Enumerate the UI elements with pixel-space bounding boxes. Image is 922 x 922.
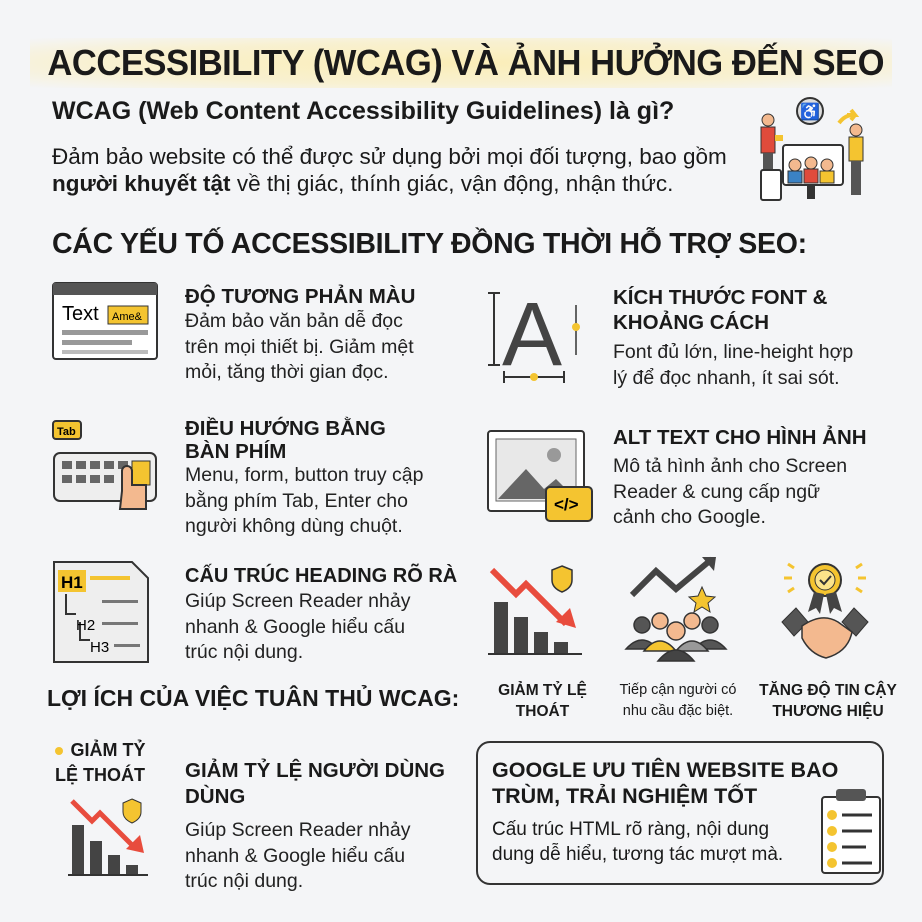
benefit: bounce [55,740,445,892]
text: font size: KHOẢNG CÁCH [613,311,769,334]
icon: heading document: H1 [61,573,83,592]
icon: letter A [488,285,580,385]
text: heading: CẤU TRÚC HEADING RÕ RÀ [185,565,457,587]
callout text: dung dễ hiểu, tương tác mượt mà. [492,844,783,865]
label: reach: nhu cầu đặc biệt. [623,703,733,719]
text: keyboard: Menu, form, button truy cập [185,464,423,486]
text: contrast: trên mọi thiết bị. Giảm mệt [185,336,414,358]
icon: heading document: H3 [90,639,109,656]
text: font size: KÍCH THƯỚC FONT & [613,286,827,309]
label: bounce [498,680,587,720]
text: keyboard: BÀN PHÍM [185,440,286,463]
icon: people growth [624,556,728,662]
icon: keyboard: Tab [57,426,76,438]
text: bounce benefit: nhanh & Google hiểu cấu [185,844,405,866]
text: font size: lý để đọc nhanh, ít sai sót. [613,366,840,388]
icon: image code: </> [554,495,579,514]
callout text [492,819,783,865]
intro heading: WCAG (Web Content Accessibility Guidelines) là gì? [52,97,674,125]
text: keyboard [185,416,423,537]
bullet label [55,740,146,785]
title: ACCESSIBILITY (WCAG) VÀ ẢNH HƯỞNG ĐẾN SEO [47,42,884,83]
icon: contrast window: Ame& [112,311,143,323]
text: heading: nhanh & Google hiểu cấu [185,616,405,638]
bullet label: LỆ THOÁT [55,765,145,785]
icon: trust handshake [781,562,869,659]
icon: contrast window: Text [62,303,99,325]
icon: letter A: A [502,285,562,385]
text: alt text: ALT TEXT CHO HÌNH ẢNH [613,426,867,449]
icon: bounce chart small [68,798,148,876]
label: trust: THƯƠNG HIỆU [772,703,884,720]
label: trust [759,680,897,720]
label: reach [619,682,736,719]
text: bounce benefit: Giúp Screen Reader nhảy [185,819,410,841]
text: bounce benefit: DÙNG [185,785,245,808]
text: heading: trúc nội dung. [185,641,303,663]
bullet label: GIẢM TỶ [70,740,146,760]
icon: keyboard [52,420,157,510]
callout title: TRÙM, TRẢI NGHIỆM TỐT [492,784,757,808]
item: keyboard [52,416,423,537]
text: keyboard: ĐIỀU HƯỚNG BẰNG [185,417,386,440]
text: keyboard: người không dùng chuột. [185,515,403,537]
text: bounce benefit: trúc nội dung. [185,870,303,892]
label: bounce: THOÁT [516,703,569,720]
text: heading [185,564,457,663]
text: alt text [613,426,867,528]
icon: people accessibility [760,97,864,201]
text: alt text: cảnh cho Google. [613,506,766,528]
item: alt text [487,426,867,528]
text: alt text: Mô tả hình ảnh cho Screen [613,455,847,477]
icon: people accessibility: ♿ [800,102,820,121]
text: bounce benefit [185,758,445,892]
text: bounce benefit: GIẢM TỶ LỆ NGƯỜI DÙNG [185,759,445,782]
icon: heading document [53,561,149,663]
intro text: người khuyết tật về thị giác, thính giác, vận động, nhận thức. [52,171,673,196]
callout text: Cấu trúc HTML rõ ràng, nội dung [492,819,769,840]
text: keyboard: bằng phím Tab, Enter cho [185,490,408,512]
item: heading [53,561,457,663]
text: contrast [185,284,415,383]
label: reach: Tiếp cận người có [619,682,736,698]
callout: google box [476,741,884,885]
label: trust: TĂNG ĐỘ TIN CẬY [759,682,897,699]
intro text [52,144,727,196]
icon: checklist [821,789,881,874]
icon: heading document: H2 [76,617,95,634]
label: bounce: GIẢM TỶ LỆ [498,682,587,699]
text: heading: Giúp Screen Reader nhảy [185,590,410,612]
benefits heading: LỢI ÍCH CỦA VIỆC TUÂN THỦ WCAG: [47,685,459,711]
icon: contrast window [52,282,158,360]
text: font size [613,286,853,388]
callout title [492,758,838,808]
text: contrast: Đảm bảo văn bản dễ đọc [185,310,403,332]
icon: bounce chart [488,565,582,655]
item: contrast [52,282,415,383]
text: alt text: Reader & cung cấp ngữ [613,480,820,502]
item: font size [488,285,853,388]
section heading: CÁC YẾU TỐ ACCESSIBILITY ĐỒNG THỜI HỖ TRỢ SEO: [52,228,807,260]
icon: image code [487,430,593,522]
intro text: Đảm bảo website có thể được sử dụng bởi mọi đối tượng, bao gồm [52,144,727,169]
text: contrast: ĐỘ TƯƠNG PHẢN MÀU [185,285,415,308]
callout title: GOOGLE ƯU TIÊN WEBSITE BAO [492,758,838,782]
text: contrast: mỏi, tăng thời gian đọc. [185,361,389,383]
text: font size: Font đủ lớn, line-height hợp [613,341,853,363]
